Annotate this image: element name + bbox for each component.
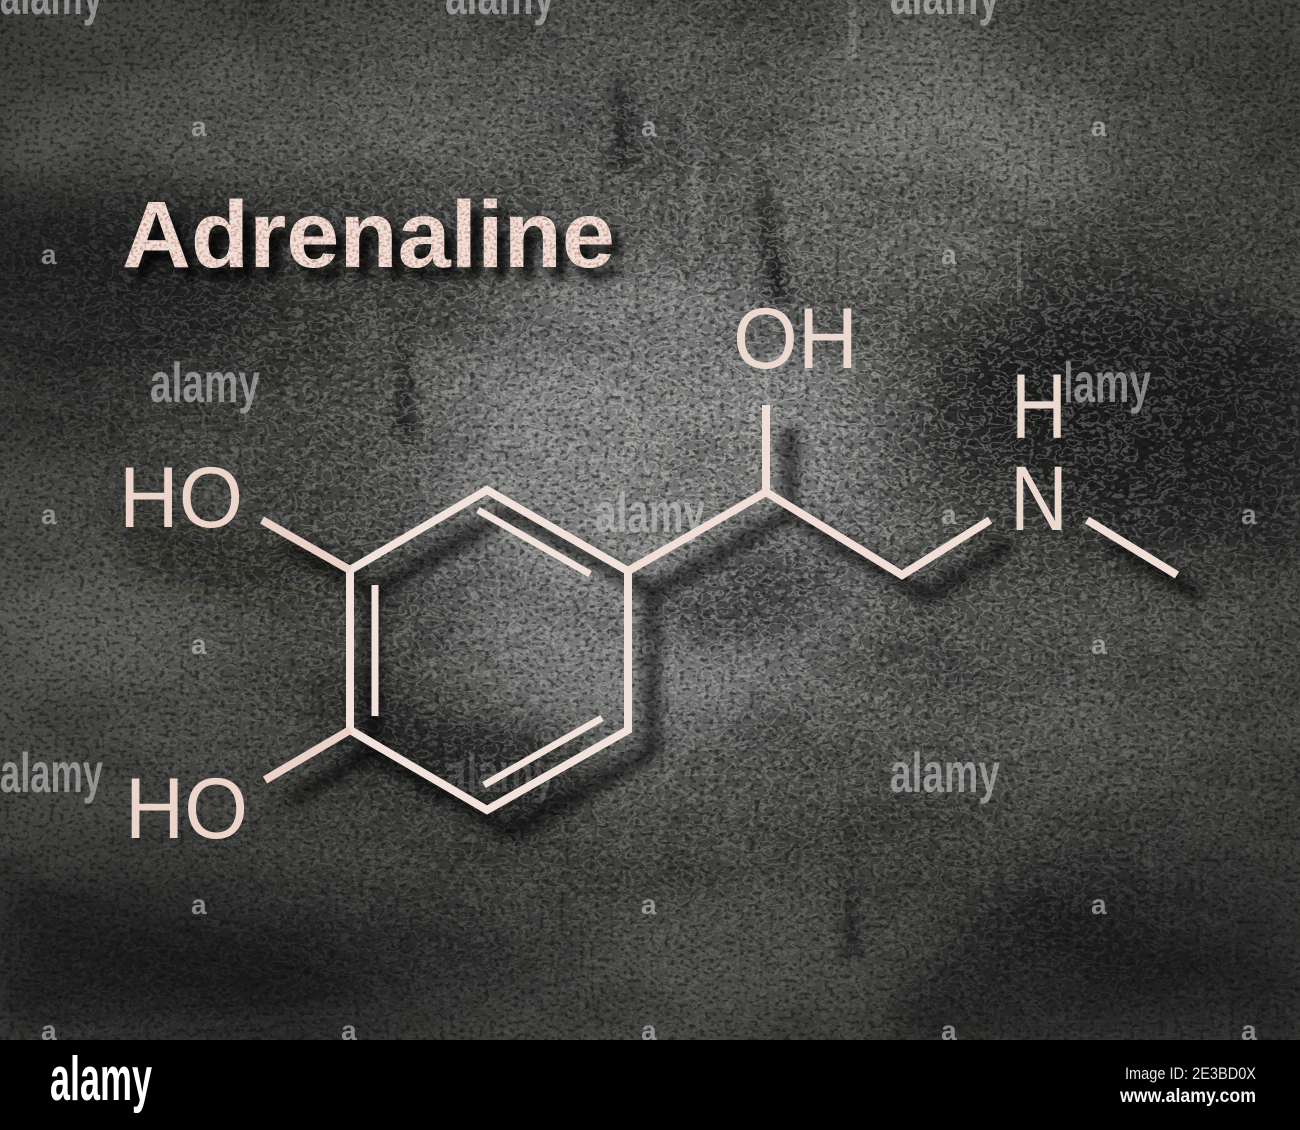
watermark letters: small a marks: a <box>1091 889 1107 920</box>
watermark letters: small a marks: a <box>191 889 207 920</box>
footer url: www.alamy.com <box>1119 1086 1256 1107</box>
watermark letters: small a marks: a <box>941 1015 957 1046</box>
footer bar <box>0 1040 1300 1130</box>
watermark letters: small a marks: a <box>191 629 207 660</box>
title shadow: Adrenaline <box>132 194 625 300</box>
watermark row: lower: alamy <box>0 741 103 804</box>
watermark letters: small a marks: a <box>41 1015 57 1046</box>
watermark row: top <box>0 0 1000 26</box>
watermark row: lower: alamy <box>445 741 555 804</box>
benzene ring bonds <box>350 490 628 810</box>
watermark row: middle <box>150 351 1151 544</box>
title <box>122 182 625 300</box>
watermark row: lower: alamy <box>890 741 1000 804</box>
watermark letters: small a marks: a <box>1091 629 1107 660</box>
watermark letters: small a marks: a <box>941 239 957 270</box>
molecule drop shadow <box>286 427 1201 832</box>
watermark letters: small a marks: a <box>191 111 207 142</box>
atom label: N: N <box>1010 448 1068 550</box>
watermark letters: small a marks: a <box>41 239 57 270</box>
atom label: upper HO: HO <box>119 450 243 546</box>
watermark letters: small a marks: a <box>341 1015 357 1046</box>
atom label: lower HO: HO <box>125 761 248 857</box>
atom label: OH: OH <box>733 291 858 387</box>
watermark letters: small a marks: a <box>641 111 657 142</box>
watermark letters: small a marks: a <box>41 499 57 530</box>
watermark letters: small a marks: a <box>1241 1015 1257 1046</box>
watermark letters: small a marks: a <box>641 1015 657 1046</box>
side chain bonds <box>262 405 1177 780</box>
watermark row: middle: alamy <box>1041 351 1151 414</box>
watermark letters: small a marks: a <box>641 629 657 660</box>
watermark letters: small a marks: a <box>1091 111 1107 142</box>
watermark letters: small a marks: a <box>641 889 657 920</box>
watermark letters: small a marks: a <box>941 499 957 530</box>
title text: Adrenaline <box>122 182 615 288</box>
watermark letters: small a marks <box>41 111 1257 1046</box>
watermark letters: small a marks: a <box>1241 499 1257 530</box>
footer logo: alamy <box>50 1045 152 1114</box>
watermark row: lower <box>0 741 1000 804</box>
chemical structure: adrenaline molecule <box>119 291 1177 857</box>
watermark row: middle: alamy <box>150 351 260 414</box>
watermark row: middle: alamy <box>595 481 705 544</box>
footer image id: Image ID: 2E3BD0X <box>1125 1064 1256 1083</box>
atom label: H: H <box>1011 356 1067 458</box>
